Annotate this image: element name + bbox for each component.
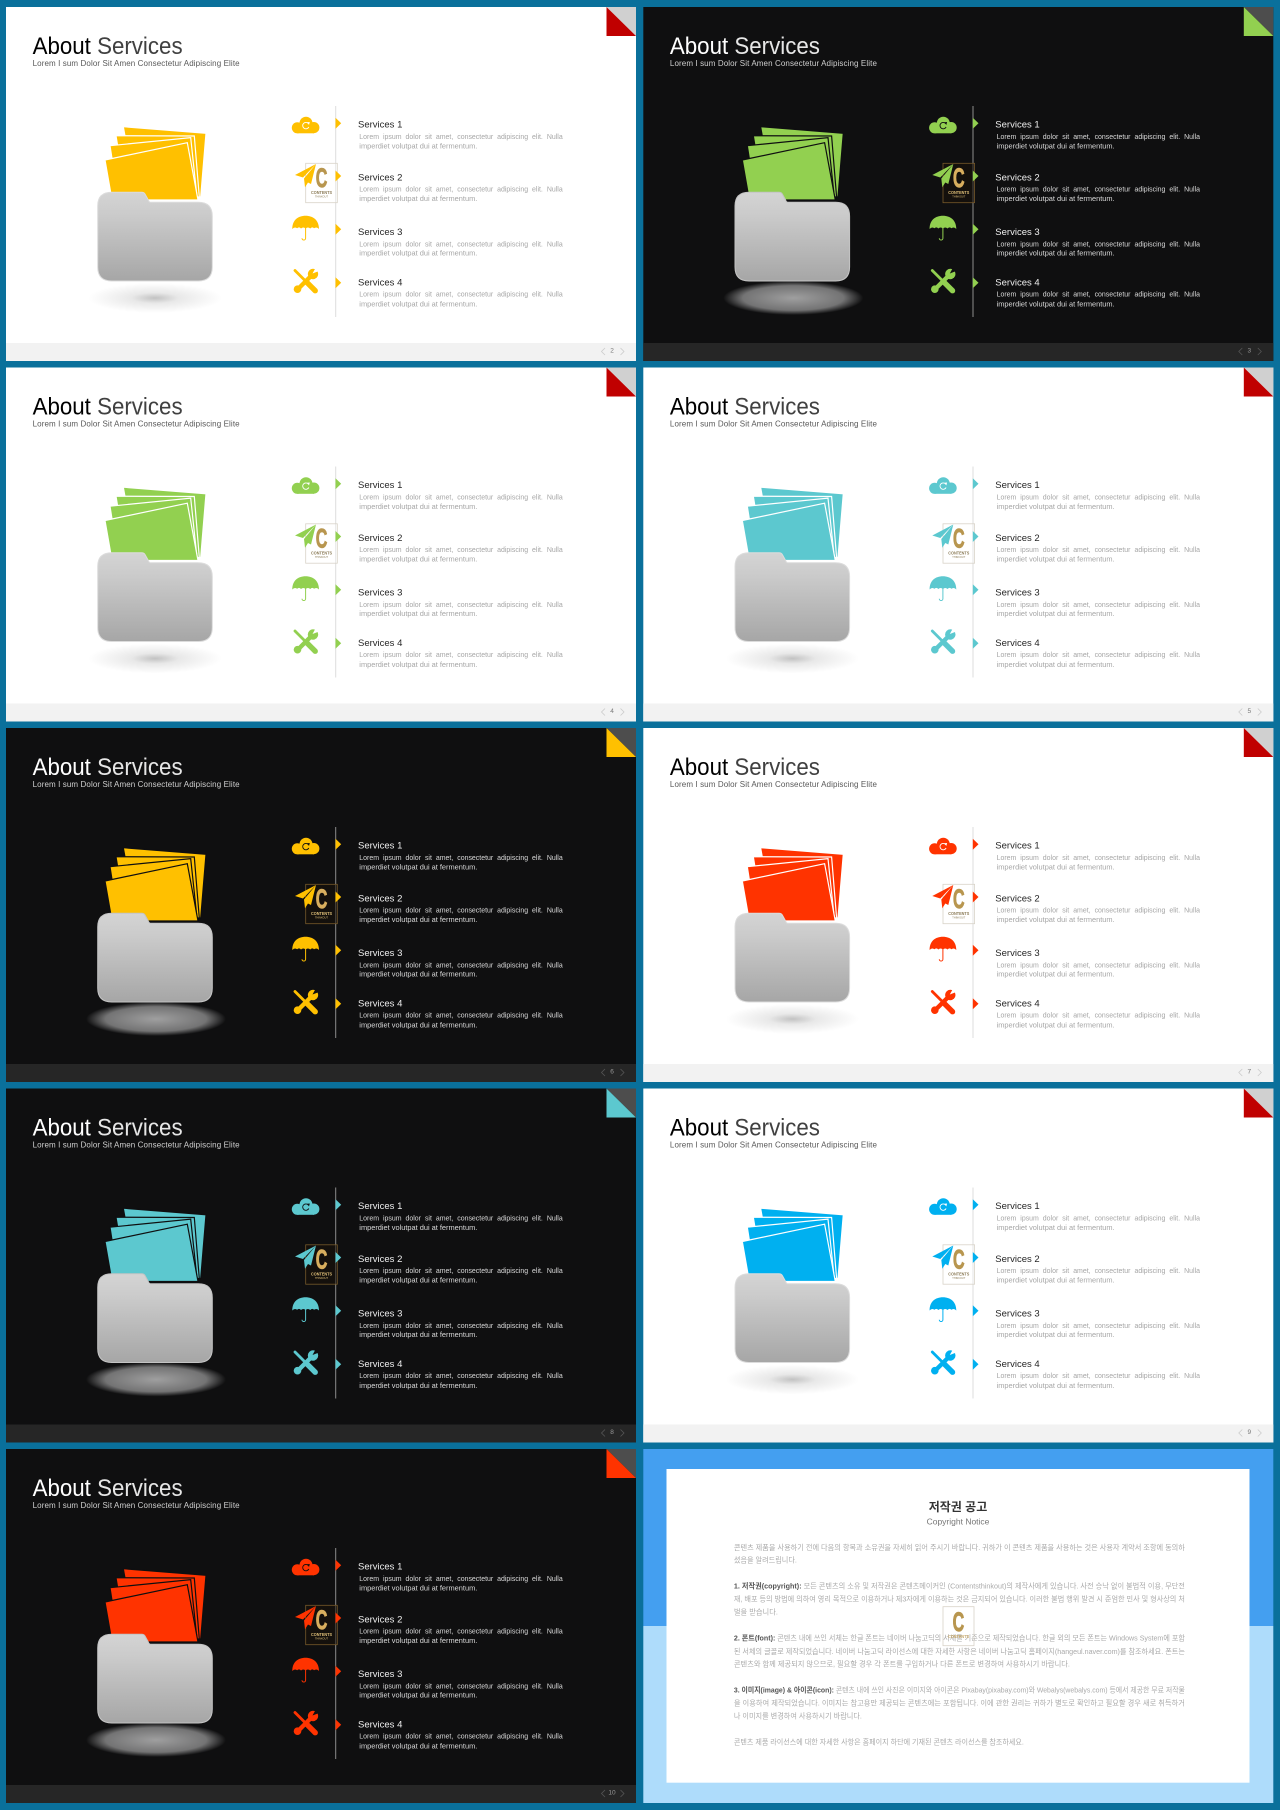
panel: slide 6 dark yellow	[6, 728, 636, 1082]
title: About Services	[33, 394, 183, 420]
illustration: folder with sheets	[725, 487, 859, 674]
footer bar: 8	[610, 1429, 614, 1436]
section 1 copyright	[734, 1581, 1185, 1617]
corner fold	[606, 7, 636, 36]
service 3: imperdiet volutpat dui at fermentum.	[359, 609, 477, 618]
service 4: imperdiet volutpat dui at fermentum.	[359, 1020, 477, 1029]
section 2 font: 된 서체의 글꼴로 제작되었습니다. 네이버 나눔고딕 라이선스에 대한 자세한 사항은 네이버 나눔고딕 홈페이지(hangeul.naver.com)를 참조하세요. 폰트는	[734, 1646, 1185, 1656]
service 2: THINKOUT	[952, 916, 966, 920]
service 2: Lorem ipsum dolor sit amet, consectetur adipiscing elit. Nulla	[359, 1627, 564, 1636]
service 4: Lorem ipsum dolor sit amet, consectetur adipiscing elit. Nulla	[997, 290, 1201, 299]
footer bar: 5	[1247, 708, 1251, 715]
service 4: Lorem ipsum dolor sit amet, consectetur adipiscing elit. Nulla	[997, 650, 1201, 659]
service 2: THINKOUT	[315, 1277, 328, 1280]
service 3: Services 3	[358, 588, 402, 598]
service 3: imperdiet volutpat dui at fermentum.	[997, 609, 1115, 618]
service 3	[292, 216, 564, 258]
closing line: 콘텐츠 제품 라이선스에 대한 자세한 사항은 홈페이지 하단에 기재된 콘텐츠 라이선스를 참조하세요.	[734, 1737, 1024, 1747]
service 3	[292, 1297, 564, 1339]
service 1: Lorem ipsum dolor sit amet, consectetur adipiscing elit. Nulla	[359, 853, 564, 862]
service 2: imperdiet volutpat dui at fermentum.	[359, 1636, 477, 1645]
service 4: imperdiet volutpat dui at fermentum.	[997, 299, 1115, 308]
service 2: Lorem ipsum dolor sit amet, consectetur adipiscing elit. Nulla	[997, 545, 1201, 554]
service 1: imperdiet volutpat dui at fermentum.	[359, 1223, 477, 1232]
service 1: Lorem ipsum dolor sit amet, consectetur adipiscing elit. Nulla	[359, 132, 564, 141]
panel: copyright notice	[643, 1449, 1273, 1803]
service 2: Services 2	[358, 172, 402, 183]
timeline line	[972, 106, 974, 317]
service 3: Lorem ipsum dolor sit amet, consectetur adipiscing elit. Nulla	[997, 960, 1201, 969]
subtitle: Lorem I sum Dolor Sit Amen Consectetur Adipiscing Elite	[670, 780, 877, 789]
title: About Services	[33, 33, 183, 60]
title: About Services	[33, 1475, 183, 1502]
service 4	[294, 989, 564, 1029]
service 2: THINKOUT	[952, 196, 966, 198]
timeline line	[972, 466, 974, 678]
service 2: THINKOUT	[952, 556, 966, 559]
service 1: Lorem ipsum dolor sit amet, consectetur adipiscing elit. Nulla	[997, 492, 1201, 502]
service 2: C	[953, 884, 965, 914]
service 2	[932, 524, 1201, 564]
footer bar	[643, 704, 1273, 722]
service 3: imperdiet volutpat dui at fermentum.	[997, 970, 1115, 979]
service 2	[295, 1605, 564, 1645]
panel: slide 4 white green	[6, 368, 636, 722]
corner fold	[606, 1449, 636, 1478]
service 4: Services 4	[358, 1359, 402, 1370]
service 4	[294, 268, 564, 308]
intro text	[734, 1542, 1185, 1564]
service 2: CONTENTS	[948, 550, 969, 556]
service 2	[932, 1244, 1201, 1284]
service 4	[931, 268, 1201, 308]
service 3	[292, 1658, 564, 1700]
service 3: Services 3	[358, 227, 402, 238]
service 2: CONTENTS	[311, 1632, 332, 1637]
service 3: Services 3	[358, 1308, 402, 1320]
panel: slide 5 white teal	[643, 368, 1273, 722]
service 4: Lorem ipsum dolor sit amet, consectetur adipiscing elit. Nulla	[359, 290, 564, 299]
title: About Services	[670, 394, 820, 420]
illustration: folder with sheets	[86, 1208, 226, 1396]
service 1: Services 1	[358, 1562, 402, 1573]
title: About Services	[670, 754, 820, 781]
service 2: Services 2	[995, 172, 1040, 183]
service 1: Lorem ipsum dolor sit amet, consectetur adipiscing elit. Nulla	[997, 853, 1201, 862]
service 1	[292, 1559, 564, 1593]
service 2	[932, 884, 1201, 924]
service 2: imperdiet volutpat dui at fermentum.	[997, 194, 1115, 203]
service 2: Services 2	[995, 893, 1040, 904]
service 4: Lorem ipsum dolor sit amet, consectetur adipiscing elit. Nulla	[997, 1011, 1201, 1020]
section 3 image and icon: 나 이미지를 변경하여 사용하시기 바랍니다.	[734, 1710, 862, 1720]
service 4: imperdiet volutpat dui at fermentum.	[359, 1741, 477, 1750]
footer bar	[6, 343, 636, 361]
service 4: imperdiet volutpat dui at fermentum.	[997, 660, 1115, 669]
service 4: Services 4	[358, 277, 402, 288]
service 3: Lorem ipsum dolor sit amet, consectetur adipiscing elit. Nulla	[997, 239, 1201, 248]
service 3	[292, 576, 564, 618]
watermark logo: CONTENTS	[948, 1634, 969, 1639]
service 2: THINKOUT	[315, 196, 328, 198]
service 4	[294, 1710, 564, 1750]
service 1: Services 1	[358, 480, 402, 491]
timeline line	[972, 827, 974, 1038]
service 2: C	[316, 524, 327, 554]
service 2: THINKOUT	[315, 1638, 328, 1640]
service 3: imperdiet volutpat dui at fermentum.	[359, 1330, 477, 1339]
service 2	[932, 163, 1201, 203]
subtitle: Lorem I sum Dolor Sit Amen Consectetur Adipiscing Elite	[33, 1501, 240, 1510]
service 2: imperdiet volutpat dui at fermentum.	[359, 554, 477, 564]
service 3: imperdiet volutpat dui at fermentum.	[359, 1691, 477, 1700]
illustration: folder with sheets	[88, 127, 222, 313]
service 3: Lorem ipsum dolor sit amet, consectetur adipiscing elit. Nulla	[359, 1681, 564, 1690]
service 4: imperdiet volutpat dui at fermentum.	[997, 1020, 1115, 1029]
subtitle: Lorem I sum Dolor Sit Amen Consectetur Adipiscing Elite	[33, 1140, 240, 1150]
service 2: CONTENTS	[948, 1272, 969, 1276]
title: About Services	[33, 1114, 183, 1142]
timeline line	[335, 1188, 336, 1398]
service 2: CONTENTS	[311, 1272, 332, 1276]
service 4: imperdiet volutpat dui at fermentum.	[359, 299, 477, 308]
section 2 font: 콘텐츠와 함께 제공되지 않으므로, 필요할 경우 각 폰트를 구입하거나 다른 폰트로 변경하여 사용하시기 바랍니다.	[734, 1659, 1070, 1669]
service 1: Services 1	[358, 1201, 402, 1212]
timeline line	[335, 466, 336, 678]
service 3: Lorem ipsum dolor sit amet, consectetur adipiscing elit. Nulla	[359, 239, 564, 248]
footer bar	[643, 1424, 1273, 1442]
service 3: Services 3	[995, 1308, 1040, 1320]
panel: slide 8 dark teal	[6, 1088, 636, 1442]
intro text: 콘텐츠 제품을 사용하기 전에 다음의 항목과 소유권을 자세히 읽어 주시기 바랍니다. 귀하가 이 콘텐츠 제품을 사용하는 것은 사용자 계약서 조항에 동의하	[734, 1542, 1185, 1552]
service 1	[929, 477, 1201, 511]
service 2	[295, 163, 564, 203]
service 2: CONTENTS	[311, 190, 332, 195]
subtitle: Lorem I sum Dolor Sit Amen Consectetur Adipiscing Elite	[670, 1140, 877, 1150]
footer bar: 6	[610, 1069, 614, 1076]
service 2: Lorem ipsum dolor sit amet, consectetur adipiscing elit. Nulla	[359, 185, 564, 194]
service 2: Services 2	[995, 533, 1040, 544]
corner fold	[1244, 7, 1273, 36]
section 1 copyright: 벌을 받습니다.	[734, 1607, 778, 1617]
service 3	[930, 216, 1201, 258]
subtitle: Lorem I sum Dolor Sit Amen Consectetur Adipiscing Elite	[670, 420, 877, 428]
service 2: Lorem ipsum dolor sit amet, consectetur adipiscing elit. Nulla	[359, 1266, 564, 1275]
service 2: imperdiet volutpat dui at fermentum.	[359, 1276, 477, 1284]
illustration: folder with sheets	[723, 127, 863, 315]
service 2: C	[316, 163, 327, 193]
service 3	[930, 937, 1201, 979]
service 1: Services 1	[995, 1201, 1040, 1212]
service 4: Lorem ipsum dolor sit amet, consectetur adipiscing elit. Nulla	[359, 650, 564, 659]
corner fold	[606, 728, 636, 757]
service 4: Lorem ipsum dolor sit amet, consectetur adipiscing elit. Nulla	[997, 1371, 1201, 1380]
service 1	[292, 838, 564, 872]
service 2: C	[316, 1605, 327, 1635]
service 3: Services 3	[995, 588, 1040, 598]
section 1 copyright: 재, 배포 등의 방법에 의하여 영리 목적으로 이용하거나 제3자에게 이용하는 것은 금지되어 있습니다. 이러한 불법 행위 발견 시 준엄한 민사 및 형사상의 처	[734, 1593, 1185, 1603]
service 4: Services 4	[995, 277, 1040, 288]
intro text: 셨음을 알려드립니다.	[734, 1554, 797, 1564]
copyright heading: 저작권 공고	[929, 1499, 987, 1514]
illustration: folder with sheets	[86, 1569, 226, 1757]
panel: slide 2 white yellow	[6, 7, 636, 361]
service 2: CONTENTS	[311, 911, 332, 916]
service 1: Lorem ipsum dolor sit amet, consectetur adipiscing elit. Nulla	[359, 492, 564, 502]
service 4	[931, 989, 1201, 1029]
service 1: imperdiet volutpat dui at fermentum.	[359, 142, 477, 151]
service 2: Lorem ipsum dolor sit amet, consectetur adipiscing elit. Nulla	[359, 545, 564, 554]
service 2: THINKOUT	[315, 556, 328, 559]
service 1	[929, 117, 1201, 151]
service 4: Services 4	[995, 1359, 1040, 1370]
service 2: CONTENTS	[948, 190, 969, 195]
footer bar: 4	[610, 708, 614, 715]
service 4: Services 4	[995, 998, 1040, 1009]
service 3	[292, 937, 564, 979]
watermark logo	[943, 1607, 974, 1646]
timeline line	[972, 1188, 974, 1398]
service 2: CONTENTS	[948, 911, 969, 916]
service 1: Services 1	[995, 841, 1040, 852]
section 3 image and icon: 을 이용하여 제작되었습니다. 이미지는 참고용만 제공되는 콘텐츠에는 포함됩니다. 이에 관한 권리는 귀하가 별도로 확인하고 필요할 경우 새로 취득하거	[734, 1698, 1185, 1708]
section 2 font: 2. 폰트(font): 콘텐츠 내에 쓰인 서체는 한글 폰트는 네이버 나눔고딕의 서체를 기준으로 제작되었습니다. 한글 외의 모든 폰트는 Windows System에 포함	[734, 1633, 1185, 1643]
footer bar	[6, 704, 636, 722]
service 1	[929, 1198, 1201, 1232]
service 2: C	[953, 163, 965, 193]
service 2: C	[316, 884, 327, 914]
footer bar	[643, 1064, 1273, 1082]
footer bar	[6, 1785, 636, 1803]
service 3: imperdiet volutpat dui at fermentum.	[359, 970, 477, 979]
service 3: Services 3	[358, 1669, 402, 1680]
service 3: imperdiet volutpat dui at fermentum.	[997, 1330, 1115, 1339]
service 4: Lorem ipsum dolor sit amet, consectetur adipiscing elit. Nulla	[359, 1011, 564, 1020]
service 2: C	[316, 1244, 327, 1274]
corner fold	[606, 1088, 636, 1118]
service 4: Lorem ipsum dolor sit amet, consectetur adipiscing elit. Nulla	[359, 1732, 564, 1741]
service 2	[295, 1244, 564, 1284]
service 2: Services 2	[995, 1254, 1040, 1265]
footer bar: 2	[610, 348, 614, 355]
panel: slide 3 dark green	[643, 7, 1273, 361]
panel: slide 7 white orange-red	[643, 728, 1273, 1082]
service 2: THINKOUT	[315, 916, 328, 920]
timeline line	[335, 106, 336, 317]
service 1: imperdiet volutpat dui at fermentum.	[997, 502, 1115, 511]
copyright subheading: Copyright Notice	[927, 1517, 990, 1527]
service 2: Lorem ipsum dolor sit amet, consectetur adipiscing elit. Nulla	[997, 1266, 1201, 1275]
service 1	[292, 1198, 564, 1232]
timeline line	[335, 827, 336, 1038]
service 2: Services 2	[358, 893, 402, 904]
service 3: Services 3	[995, 948, 1040, 959]
service 2: THINKOUT	[952, 1277, 966, 1280]
service 2: imperdiet volutpat dui at fermentum.	[997, 1276, 1115, 1284]
illustration: folder with sheets	[88, 487, 222, 674]
section 2 font	[734, 1633, 1185, 1669]
service 2: Services 2	[358, 1614, 402, 1625]
subtitle: Lorem I sum Dolor Sit Amen Consectetur Adipiscing Elite	[33, 420, 240, 428]
subtitle: Lorem I sum Dolor Sit Amen Consectetur Adipiscing Elite	[33, 780, 240, 789]
footer bar	[6, 1064, 636, 1082]
service 2	[295, 884, 564, 924]
section 1 copyright: 1. 저작권(copyright): 모든 콘텐츠의 소유 및 저작권은 콘텐츠메이커인 (Contentsthinkout)의 제작사에게 있습니다. 사전 승낙 없이 불법적 이용, 무단전	[734, 1581, 1185, 1591]
title: About Services	[670, 33, 820, 60]
watermark logo: C	[953, 1607, 964, 1637]
service 2: imperdiet volutpat dui at fermentum.	[359, 194, 477, 203]
service 3: Services 3	[358, 948, 402, 959]
service 2: Lorem ipsum dolor sit amet, consectetur adipiscing elit. Nulla	[997, 185, 1201, 194]
service 3: Services 3	[995, 227, 1040, 238]
service 3: imperdiet volutpat dui at fermentum.	[359, 249, 477, 258]
title: About Services	[33, 754, 183, 781]
footer bar: 7	[1247, 1069, 1251, 1076]
footer bar: 9	[1247, 1429, 1251, 1436]
service 1: Services 1	[995, 480, 1040, 491]
section 3 image and icon	[734, 1685, 1185, 1720]
service 4: imperdiet volutpat dui at fermentum.	[997, 1381, 1115, 1390]
service 2: Lorem ipsum dolor sit amet, consectetur adipiscing elit. Nulla	[997, 906, 1201, 915]
illustration: folder with sheets	[725, 848, 859, 1034]
illustration: folder with sheets	[725, 1208, 859, 1394]
service 1	[929, 838, 1201, 872]
footer bar: 10	[608, 1790, 616, 1797]
footer bar	[6, 1424, 636, 1442]
timeline line	[335, 1548, 336, 1759]
service 4	[931, 1350, 1201, 1390]
service 1	[292, 477, 564, 511]
service 2: Services 2	[358, 1254, 402, 1265]
service 1: Lorem ipsum dolor sit amet, consectetur adipiscing elit. Nulla	[359, 1574, 564, 1583]
service 4	[294, 1350, 564, 1390]
corner fold	[1244, 368, 1273, 396]
service 3: Lorem ipsum dolor sit amet, consectetur adipiscing elit. Nulla	[359, 960, 564, 969]
service 1: imperdiet volutpat dui at fermentum.	[997, 863, 1115, 872]
service 4: imperdiet volutpat dui at fermentum.	[359, 1381, 477, 1390]
service 4: Lorem ipsum dolor sit amet, consectetur adipiscing elit. Nulla	[359, 1371, 564, 1380]
service 1: imperdiet volutpat dui at fermentum.	[997, 142, 1115, 151]
service 2: C	[953, 1244, 965, 1274]
service 4: Services 4	[358, 1719, 402, 1730]
panel: slide 9 white blue	[643, 1088, 1273, 1442]
corner fold	[1244, 728, 1273, 757]
service 4: Services 4	[358, 638, 402, 649]
service 1: Services 1	[995, 120, 1040, 131]
service 1: imperdiet volutpat dui at fermentum.	[997, 1223, 1115, 1232]
footer bar	[643, 343, 1273, 361]
service 2: imperdiet volutpat dui at fermentum.	[997, 554, 1115, 564]
service 1: Lorem ipsum dolor sit amet, consectetur adipiscing elit. Nulla	[997, 132, 1201, 141]
service 2: C	[953, 524, 965, 554]
subtitle: Lorem I sum Dolor Sit Amen Consectetur Adipiscing Elite	[670, 59, 877, 68]
corner fold	[1244, 1088, 1273, 1118]
panel: slide 10 dark orange-red	[6, 1449, 636, 1803]
service 3: Lorem ipsum dolor sit amet, consectetur adipiscing elit. Nulla	[359, 1321, 564, 1330]
service 3: Lorem ipsum dolor sit amet, consectetur adipiscing elit. Nulla	[997, 600, 1201, 609]
service 4: imperdiet volutpat dui at fermentum.	[359, 660, 477, 669]
footer bar: 3	[1247, 348, 1251, 355]
subtitle: Lorem I sum Dolor Sit Amen Consectetur Adipiscing Elite	[33, 59, 240, 68]
service 2: Lorem ipsum dolor sit amet, consectetur adipiscing elit. Nulla	[359, 906, 564, 915]
service 1: imperdiet volutpat dui at fermentum.	[359, 863, 477, 872]
service 2: imperdiet volutpat dui at fermentum.	[359, 915, 477, 924]
service 2	[295, 524, 564, 564]
service 3: Lorem ipsum dolor sit amet, consectetur adipiscing elit. Nulla	[997, 1321, 1201, 1330]
service 3	[930, 576, 1201, 618]
service 4: Services 4	[358, 998, 402, 1009]
service 4	[294, 628, 564, 669]
title: About Services	[670, 1114, 820, 1142]
service 1: imperdiet volutpat dui at fermentum.	[359, 502, 477, 511]
section 3 image and icon: 3. 이미지(image) & 아이콘(icon): 콘텐츠 내에 쓰인 사진은 이미지와 아이콘은 Pixabay(pixabay.com)와 Webalys(webalys.com) 등에서 제공한 무료 저작물	[734, 1685, 1185, 1695]
service 3: Lorem ipsum dolor sit amet, consectetur adipiscing elit. Nulla	[359, 600, 564, 609]
service 2: imperdiet volutpat dui at fermentum.	[997, 915, 1115, 924]
service 1: Services 1	[358, 841, 402, 852]
service 2: CONTENTS	[311, 550, 332, 556]
service 1: Lorem ipsum dolor sit amet, consectetur adipiscing elit. Nulla	[997, 1214, 1201, 1222]
service 1: Lorem ipsum dolor sit amet, consectetur adipiscing elit. Nulla	[359, 1214, 564, 1222]
service 4: Services 4	[995, 638, 1040, 649]
service 1	[292, 117, 564, 151]
corner fold	[606, 368, 636, 396]
service 1: Services 1	[358, 120, 402, 131]
illustration: folder with sheets	[86, 848, 226, 1036]
service 3: imperdiet volutpat dui at fermentum.	[997, 249, 1115, 258]
service 3	[930, 1297, 1201, 1339]
service 4	[931, 628, 1201, 669]
service 1: imperdiet volutpat dui at fermentum.	[359, 1584, 477, 1593]
service 2: Services 2	[358, 533, 402, 544]
